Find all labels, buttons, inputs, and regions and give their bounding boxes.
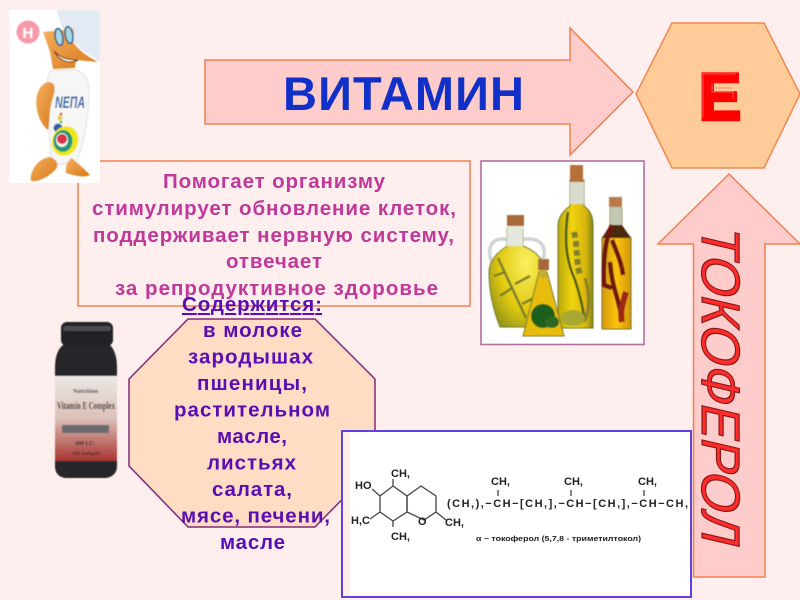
small triangular bottle (523, 259, 564, 336)
arrow title: ВИТАМИН (283, 67, 524, 120)
image: tocopherol structural formula: CH, (391, 531, 410, 543)
image: tocopherol structural formula: α − токоферол (5,7,8 - триметилтокол) (476, 536, 641, 543)
benefits text block: Помогает организму (163, 170, 386, 193)
mascot head (43, 29, 98, 69)
image: tocopherol structural formula: CH, (491, 476, 510, 488)
mascot label: NEПА (55, 93, 85, 112)
image: tocopherol structural formula: CH, (564, 476, 583, 488)
bottle label text: 100 Softgels (72, 452, 100, 457)
panel: benefits text (78, 161, 470, 306)
sources text block: листьях (207, 452, 297, 474)
image: oil bottles (481, 161, 644, 344)
sources text block: Содержится: (182, 293, 322, 316)
image: tocopherol structural formula: CH, (445, 517, 464, 529)
bottle label text (57, 389, 115, 457)
image: tocopherol structural formula: H,C (351, 515, 370, 527)
mascot badge (16, 20, 40, 44)
image: tocopherol structural formula: CH, (391, 468, 410, 480)
mascot bottle body (47, 70, 89, 165)
image: mascot: H (22, 25, 33, 42)
jug bottle (489, 215, 546, 327)
image: tocopherol structural formula: CH, (638, 476, 657, 488)
image: tocopherol structural formula: HO (355, 480, 372, 492)
arrow: витамин banner (205, 28, 633, 155)
benefits text block (92, 170, 456, 300)
letter E: E (699, 60, 741, 134)
arrow vertical label: ТОКОФЕРОЛ (690, 221, 751, 553)
image: tocopherol structural formula: O (418, 516, 427, 528)
sources text block: масле (220, 531, 285, 554)
formula ring structure (370, 479, 644, 527)
sources text block: пшеницы, (197, 372, 307, 395)
tall bottle (558, 165, 593, 328)
panel: sources octagon (129, 293, 375, 554)
benefits text block: за репродуктивное здоровье (115, 277, 438, 300)
sources text block: мясе, печени, (181, 504, 330, 528)
bottle label text: Nutrition (73, 389, 99, 395)
benefits text block: поддерживает нервную систему, (93, 224, 454, 247)
sources text block: масле, (217, 425, 287, 448)
image: mascot (9, 10, 100, 183)
sources text block: растительном (174, 398, 330, 422)
arrow: токоферол (658, 174, 800, 577)
sources text block (174, 293, 330, 554)
hexagon: vitamin letter E (636, 23, 800, 168)
sources text block: в молоке (203, 319, 302, 342)
bottle label text: 400 I.U. (75, 441, 96, 447)
benefits text block: стимулирует обновление клеток, (92, 197, 456, 220)
image: tocopherol structural formula: (CH,),−CH−[CH,],−CH−[CH,],−CH−CH, (447, 498, 688, 510)
right bottle (602, 197, 631, 329)
sources text block: зародышах (188, 346, 314, 368)
bottle label text: Vitamin E Complex (57, 400, 115, 412)
image: tocopherol structural formula (342, 431, 691, 597)
benefits text block: отвечает (226, 250, 322, 273)
image: vitamin E bottle (55, 322, 117, 478)
sources text block: салата, (212, 478, 292, 501)
